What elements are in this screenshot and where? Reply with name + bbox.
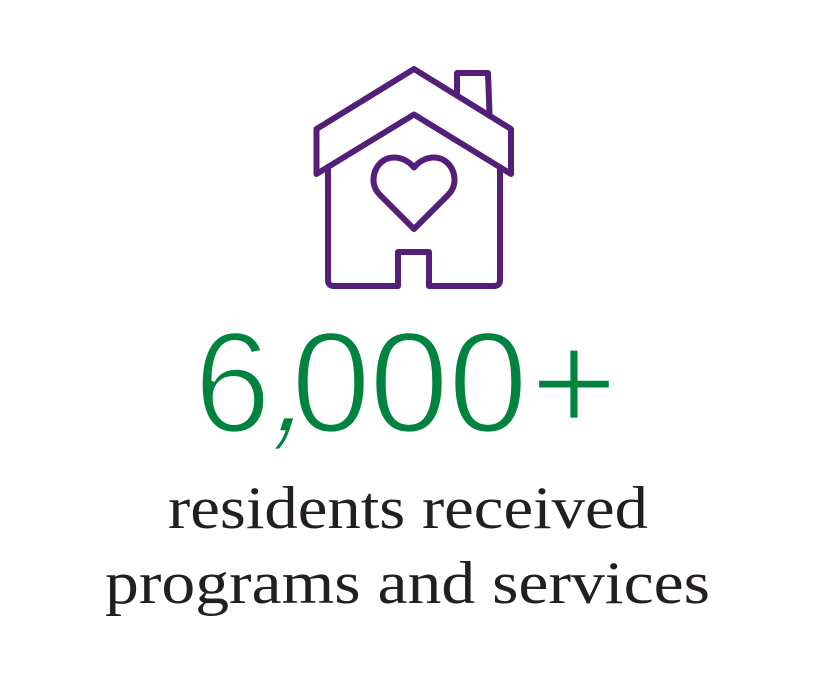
icon: house with heart xyxy=(316,69,511,286)
caption line 1: residents received xyxy=(168,475,648,541)
icon: walls and door xyxy=(328,167,500,286)
digit 0: 0 xyxy=(448,302,528,463)
caption xyxy=(105,475,710,616)
digit 0: 0 xyxy=(291,302,371,463)
icon: roof xyxy=(316,69,511,174)
digit 6: 6 xyxy=(194,302,271,463)
big number xyxy=(194,302,618,463)
plus sign: + xyxy=(530,302,618,463)
icon: heart xyxy=(374,158,454,229)
comma: , xyxy=(256,302,344,463)
digit 0: 0 xyxy=(369,302,449,463)
icon: chimney xyxy=(457,73,490,113)
caption line 2: programs and services xyxy=(105,550,710,616)
